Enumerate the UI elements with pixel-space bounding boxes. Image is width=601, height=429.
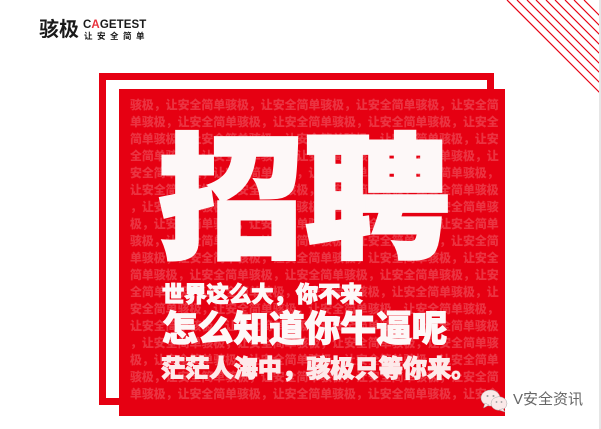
tagline line 2: 怎么知道你牛逼呢 <box>162 309 448 349</box>
logo: CAGETEST <box>39 18 149 41</box>
watermark text pattern <box>130 98 499 401</box>
logo chinese name: 骇极 <box>39 19 79 41</box>
tagline line 3: 茫茫人海中，骇极只等你来。 <box>161 356 475 383</box>
main title: 招聘 <box>158 124 450 276</box>
decorative diagonal stripes <box>506 0 601 100</box>
logo latin name: CAGETEST <box>83 19 146 31</box>
icon: wechat bubbles <box>480 390 508 412</box>
outer red frame <box>99 73 494 405</box>
tagline line 1: 世界这么大，你不来 <box>162 282 363 307</box>
source watermark text: V安全资讯 <box>513 391 583 408</box>
red main panel <box>119 89 505 416</box>
logo slogan: 让安全简单 <box>84 31 149 41</box>
